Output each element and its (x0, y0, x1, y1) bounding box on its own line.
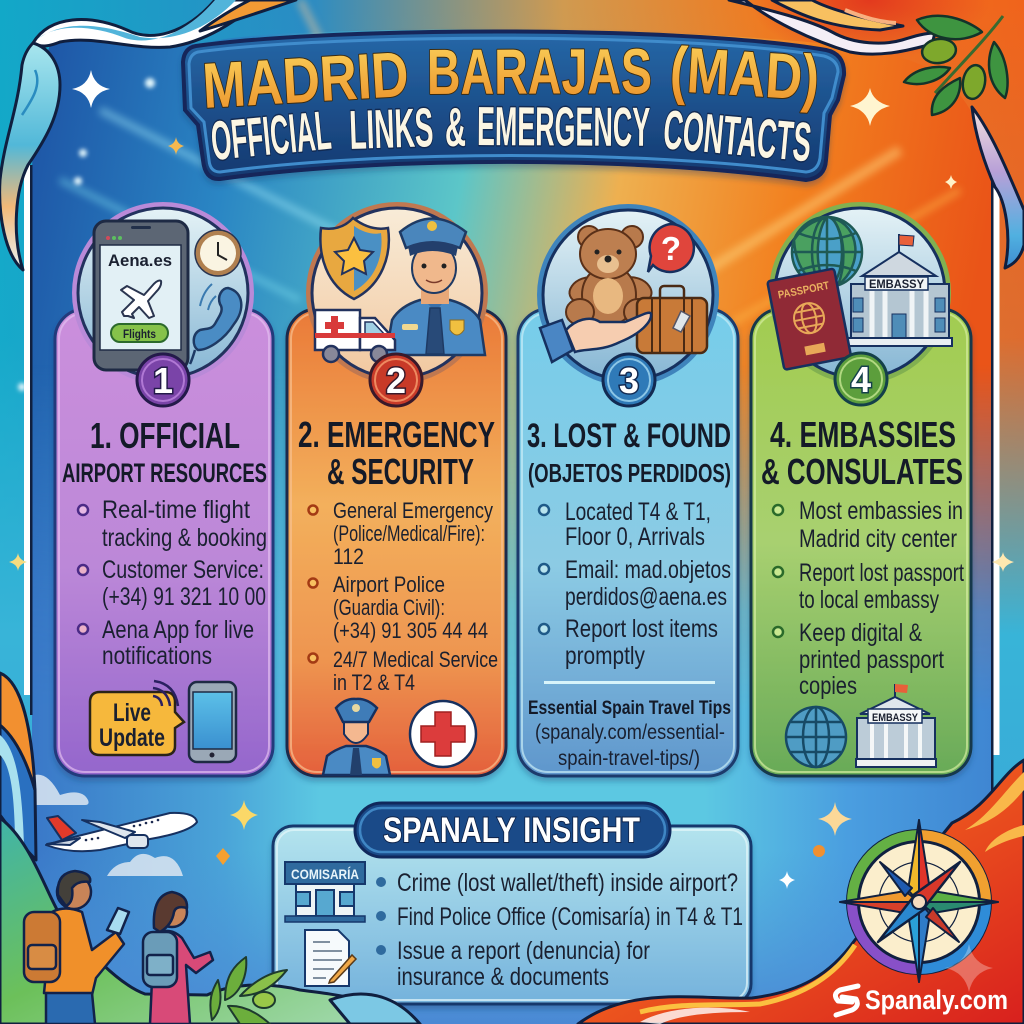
insight bullets: Crime (lost wallet/theft) inside airport? (397, 869, 738, 897)
embassy building (848, 234, 952, 346)
bullets: in T2 & T4 (333, 670, 415, 695)
title text: & (445, 96, 466, 158)
phone with Aena.es (94, 221, 188, 370)
bullets: (+34) 91 321 10 00 (102, 583, 266, 611)
decorative frame: left and right white rails (24, 165, 1000, 795)
report document icon (305, 930, 356, 986)
bullets: (Guardia Civil): (333, 595, 445, 620)
ribbon: top right (729, 0, 1024, 268)
bullets: Report lost passport (799, 559, 964, 587)
bullets: Aena App for live (102, 616, 254, 644)
title text (201, 33, 821, 173)
number badge 3: 3 (619, 360, 639, 401)
phone with Aena.es: Aena.es (108, 251, 172, 270)
panel 1 card: official airport resources (55, 309, 273, 776)
bullets: to local embassy (799, 586, 939, 614)
number badge 3 (603, 354, 655, 406)
small phone (189, 682, 236, 762)
clock (195, 230, 241, 276)
bullets: Report lost items (565, 615, 718, 643)
title text: LINKS (348, 96, 434, 161)
heading: 3. LOST & FOUND (527, 417, 731, 455)
number badge 2 (370, 354, 422, 406)
small officer (323, 699, 390, 775)
insight bullets: Find Police Office (Comisaría) in T4 & T1 (397, 903, 743, 931)
insight header pill: SPANALY INSIGHT (383, 811, 640, 850)
globe (792, 217, 862, 287)
bullets: printed passport (799, 646, 944, 674)
insight panel (273, 826, 751, 1004)
small embassy: EMBASSY (872, 712, 919, 724)
ribbon: lower left (0, 673, 36, 860)
title text: (MAD) (668, 33, 821, 114)
travel tips note: Essential Spain Travel Tips (528, 698, 731, 719)
comisaria icon: COMISARÍA (291, 866, 359, 882)
question bubble (648, 224, 694, 272)
bullets: Email: mad.objetos (565, 556, 731, 584)
bullets: Madrid city center (799, 525, 957, 553)
bullets: Floor 0, Arrivals (565, 523, 705, 551)
embassy building: EMBASSY (869, 277, 924, 291)
bullets: tracking & booking (102, 524, 267, 552)
heading (298, 414, 495, 492)
number badge 1 (137, 354, 189, 406)
bullets: Airport Police (333, 572, 445, 597)
heading: AIRPORT RESOURCES (62, 458, 267, 488)
bullets (78, 496, 267, 670)
panel 4 text (761, 414, 964, 767)
heading (527, 417, 731, 488)
telephone handset (190, 284, 241, 364)
insight bullets: insurance & documents (397, 963, 609, 991)
heading (62, 415, 267, 488)
flame: bottom right (578, 760, 1024, 1024)
title text: BARAJAS (427, 35, 652, 108)
sparkles (9, 70, 1014, 889)
live update tag: Update (99, 724, 165, 752)
panel 4 card: embassies and consulates (751, 309, 971, 776)
insight header pill (355, 803, 670, 857)
bullets: Customer Service: (102, 556, 264, 584)
bullets (308, 498, 498, 695)
comisaria icon (285, 862, 365, 922)
olive branch: bottom (210, 957, 287, 1024)
woman with backpack (143, 892, 213, 1024)
panel 1 text (62, 415, 267, 762)
first aid cross (410, 701, 476, 767)
bullets: (Police/Medical/Fire): (333, 521, 485, 546)
bullets: Keep digital & (799, 619, 922, 647)
airplane (46, 813, 197, 851)
icon circle 1: phone, clock, handset (72, 202, 254, 384)
panel 3 text (527, 417, 731, 770)
man with backpack (24, 871, 129, 1024)
panel 2 text (298, 414, 498, 775)
bullets: Located T4 & T1, (565, 498, 711, 526)
clouds (35, 775, 183, 876)
police officer (386, 218, 485, 355)
panel 2 card: emergency and security (287, 309, 506, 776)
olive branch: top right (904, 16, 1007, 115)
compass (840, 820, 998, 982)
shield with star (320, 218, 389, 299)
watermark sparkle (945, 944, 993, 992)
live update tag (90, 681, 184, 755)
title banner (183, 31, 844, 180)
bullets: promptly (565, 642, 645, 670)
travelers (24, 871, 213, 1024)
small embassy (856, 684, 936, 767)
insight bullets: Issue a report (denuncia) for (397, 937, 650, 965)
heading: 2. EMERGENCY (298, 414, 495, 455)
bullets: copies (799, 672, 857, 700)
ribbon: top left (0, 0, 296, 270)
number badge 1: 1 (153, 360, 173, 401)
heading: (OBJETOS PERDIDOS) (528, 458, 731, 488)
bullets (539, 498, 731, 670)
heading: 1. OFFICIAL (90, 415, 240, 456)
bullets: Real-time flight (102, 496, 250, 524)
title text: CONTACTS (661, 98, 814, 173)
icon circle 2: shield, officer, ambulance (306, 202, 488, 384)
heading: 4. EMBASSIES (770, 414, 956, 455)
bullets (773, 497, 964, 700)
insight bullets (376, 869, 743, 991)
live update tag: Live (113, 699, 151, 727)
ambulance (315, 310, 395, 362)
number badge 4: 4 (851, 359, 871, 400)
panel 3 card: lost and found (518, 309, 738, 776)
divider (544, 681, 715, 684)
bullets: perdidos@aena.es (565, 583, 727, 611)
bullets: (+34) 91 305 44 44 (333, 618, 488, 643)
phone with Aena.es: Flights (123, 327, 156, 341)
bullets: notifications (102, 642, 212, 670)
bullets: 24/7 Medical Service (333, 647, 498, 672)
travel tips note: spain-travel-tips/) (558, 747, 700, 770)
bullets: 112 (333, 544, 364, 569)
question bubble: ? (661, 230, 681, 267)
passport (767, 269, 851, 370)
title text: OFFICIAL (208, 99, 334, 172)
icon circle 3: teddy, question bubble, suitcase, hand (537, 204, 719, 386)
travel tips note (528, 698, 731, 770)
hill: bottom left (0, 818, 420, 1024)
heading (761, 414, 963, 492)
title text: EMERGENCY (477, 95, 650, 158)
small globe (786, 707, 846, 767)
number badge 2: 2 (386, 360, 406, 401)
passport: PASSPORT (777, 280, 831, 302)
heading: & SECURITY (327, 451, 474, 492)
icon circle 4: globe, passport, embassy (767, 202, 952, 384)
suitcase (637, 286, 707, 353)
teddy bear (566, 226, 655, 325)
number badge 4 (835, 353, 887, 405)
bullets: Most embassies in (799, 497, 963, 525)
travel tips note: (spanaly.com/essential- (535, 721, 725, 744)
bullets: General Emergency (333, 498, 493, 523)
title text: MADRID (201, 38, 410, 122)
open hand (540, 313, 651, 362)
